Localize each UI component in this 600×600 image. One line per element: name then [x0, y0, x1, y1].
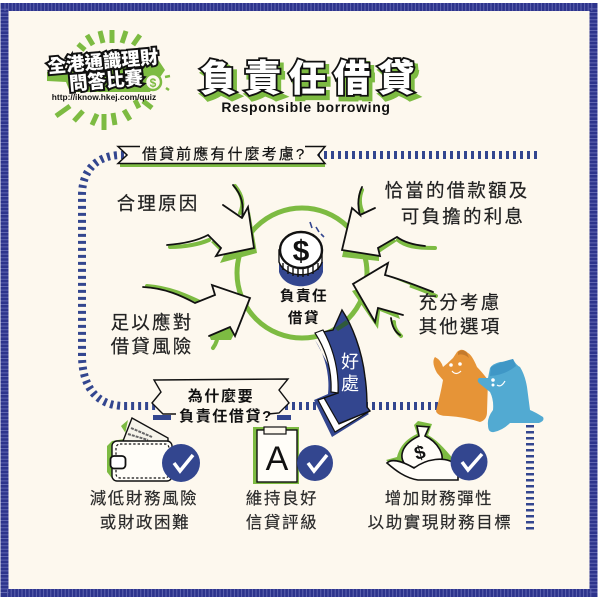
center label line 1: 負責任 [280, 287, 328, 305]
arrow dark green fold [335, 320, 349, 331]
why text 1: 為什麼要 [188, 387, 254, 405]
hand [387, 459, 458, 480]
label: handle risk [111, 312, 193, 357]
wallet stitching [116, 444, 169, 478]
contest logo [46, 30, 170, 130]
logo title line 1: 全港通識理財 [46, 43, 160, 79]
benefit 3 line 2: 以助實現財務目標 [368, 513, 512, 532]
bag green outline [386, 421, 456, 470]
arrow: lower right [352, 263, 436, 336]
logo green backing [47, 55, 165, 92]
wallet body [112, 441, 172, 481]
logo url: http://iknow.hkej.com/quiz [52, 92, 156, 102]
benefit 1 text [90, 489, 198, 532]
banner: why [152, 379, 291, 425]
check: clipboard [297, 445, 333, 481]
benefit 2 text [246, 489, 318, 532]
ghost head shade [490, 359, 516, 376]
wallet green backing [107, 420, 160, 481]
why ribbon outline [152, 379, 289, 414]
why ribbon [152, 379, 289, 414]
alternatives line 1: 充分考慮 [419, 292, 501, 313]
center label line 2: 借貸 [288, 309, 320, 327]
banner green shadow [120, 163, 325, 167]
grade letter: A [266, 440, 289, 478]
arrow white lower edge [318, 398, 370, 432]
coin blue base [279, 262, 323, 286]
clipboard backing [253, 427, 299, 484]
bear ear [458, 350, 469, 358]
clipboard clip [264, 427, 286, 434]
center label [280, 287, 328, 327]
ghost face [491, 378, 505, 386]
handle risk line 1: 足以應對 [111, 312, 193, 333]
benefit 2 line 2: 信貸評級 [246, 513, 318, 532]
why blue shadow [153, 415, 291, 420]
arrow label: 好 [341, 352, 359, 372]
dashed path: upper loop [82, 155, 537, 406]
banner: before borrowing [118, 145, 325, 167]
orange bear mascot [433, 350, 488, 422]
coin icon [279, 222, 324, 286]
dashed path: right drop [526, 425, 534, 533]
coin sparkle [310, 222, 324, 237]
check: money bag [450, 444, 488, 480]
bill print [128, 428, 152, 440]
benefit 3 text [368, 489, 512, 532]
banner ribbon outline [118, 146, 325, 164]
wallet icon [107, 418, 172, 481]
subtitle: Responsible borrowing [221, 99, 391, 115]
logo title line 2: 問答比賽 [68, 64, 144, 96]
arrow: top right [342, 187, 435, 261]
why text 2: 負責任借貸? [179, 407, 273, 425]
label: reasonable cause: 合理原因 [117, 193, 199, 214]
arrow body [323, 310, 370, 424]
arrow: top left [167, 185, 257, 263]
suitable amount line 2: 可負擔的利息 [401, 206, 525, 227]
banner text: 借貸前應有什麼考慮? [142, 145, 306, 163]
title lettering: 負責任借貸 [200, 48, 422, 102]
banner ribbon fill [118, 146, 325, 164]
benefit 3 line 1: 增加財務彈性 [385, 489, 493, 508]
title green shadow: 負責任借貸 [203, 52, 425, 106]
dashed path: lower link [285, 402, 445, 410]
bag [402, 426, 442, 468]
label: suitable amount [385, 180, 529, 227]
clipboard sheet [257, 430, 297, 482]
benefit 1 line 1: 減低財務風險 [90, 489, 198, 508]
bag dollar: $ [412, 442, 428, 465]
handle risk line 2: 借貸風險 [111, 336, 193, 357]
coin face [280, 232, 322, 268]
arrow: lower left [143, 285, 250, 348]
arrow shadow [314, 340, 369, 437]
bills [123, 418, 168, 442]
benefit 2 line 1: 維持良好 [246, 489, 318, 508]
blue ghost mascot [478, 359, 544, 432]
dollar sign: $ [293, 235, 310, 268]
clipboard icon [253, 427, 299, 484]
money bag icon [386, 421, 458, 480]
arrow white ribbon [315, 330, 338, 393]
bear face [449, 362, 462, 374]
logo sunburst rays [56, 30, 152, 130]
label: alternatives [419, 292, 501, 337]
arrow label lower: 處 [341, 374, 359, 394]
central green circle [237, 208, 367, 338]
suitable amount line 1: 恰當的借款額及 [385, 180, 529, 201]
big blue arrow: benefits [314, 310, 370, 437]
alternatives line 2: 其他選項 [419, 316, 501, 337]
benefit 1 line 2: 或財政困難 [100, 513, 190, 532]
wallet clasp [110, 456, 126, 468]
check: wallet [162, 444, 200, 482]
logo dollar badge: $ [150, 76, 157, 90]
main title [200, 48, 425, 106]
coin ridges [279, 250, 322, 275]
